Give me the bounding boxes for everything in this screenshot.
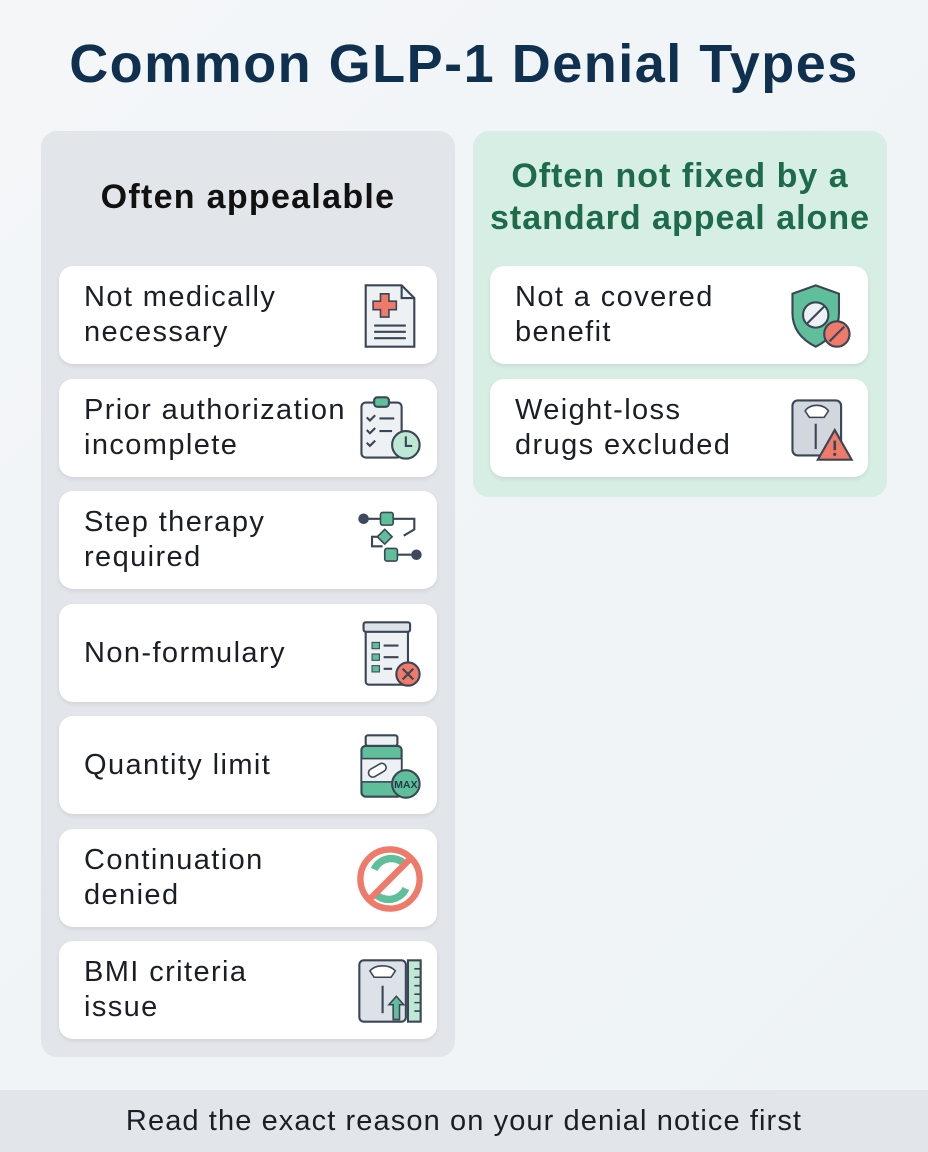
heading: often appealable: Often appealable <box>101 178 395 216</box>
card: weight-loss drugs excluded <box>490 379 868 477</box>
icon: clipboard timer <box>360 396 421 460</box>
card: prior authorization <box>59 379 437 477</box>
panel: often appealable <box>41 131 455 1057</box>
panel: not fixed by standard appeal <box>473 131 887 497</box>
card: not a covered benefit: benefit <box>515 316 612 348</box>
card: BMI criteria: issue <box>84 991 159 1023</box>
heading: often not fixed <box>490 157 870 237</box>
icon: formulary list with x <box>362 621 421 687</box>
card: quantity limit <box>59 716 437 814</box>
icon: shield with pill <box>791 284 851 348</box>
card: non-formulary <box>59 604 437 702</box>
heading: often not fixed: standard appeal alone <box>490 199 870 237</box>
heading: often not fixed: Often not fixed by a <box>511 157 849 195</box>
icon: flowchart <box>358 512 422 562</box>
card: prior authorization: incomplete <box>84 429 238 461</box>
card: weight-loss drugs excluded: Weight-loss <box>515 394 681 426</box>
card: weight-loss drugs excluded: drugs excluded <box>515 429 731 461</box>
card: non-formulary: Non-formulary <box>84 636 286 668</box>
card: step therapy <box>59 491 437 589</box>
card: step therapy: Step therapy <box>84 506 265 538</box>
icon: scale with warning <box>791 399 854 461</box>
card: not a covered benefit <box>490 266 868 364</box>
title: Common GLP-1 Denial Types <box>69 34 859 94</box>
icon: scale with ruler <box>358 959 422 1023</box>
card: not a covered benefit: Not a covered <box>515 281 714 313</box>
icon: pill bottle max: MAX <box>394 779 418 791</box>
icon: medical document <box>364 284 416 348</box>
card: not medically necessary: necessary <box>84 316 229 348</box>
card: BMI criteria <box>59 941 437 1039</box>
card: prior authorization: Prior authorization <box>84 394 346 426</box>
card: not medically necessary <box>59 266 437 364</box>
card: quantity limit: Quantity limit <box>84 748 271 780</box>
icon: no renewal <box>357 846 423 912</box>
footer: Read the exact reason on your denial notice first <box>126 1105 802 1137</box>
footer <box>0 1090 928 1152</box>
card: continuation denied <box>59 829 437 927</box>
card: not medically necessary: Not medically <box>84 281 276 313</box>
card: continuation denied: Continuation <box>84 844 264 876</box>
card: continuation denied: denied <box>84 879 180 911</box>
icon: pill bottle max <box>360 734 421 799</box>
card: step therapy: required <box>84 541 202 573</box>
card: BMI criteria: BMI criteria <box>84 956 247 988</box>
